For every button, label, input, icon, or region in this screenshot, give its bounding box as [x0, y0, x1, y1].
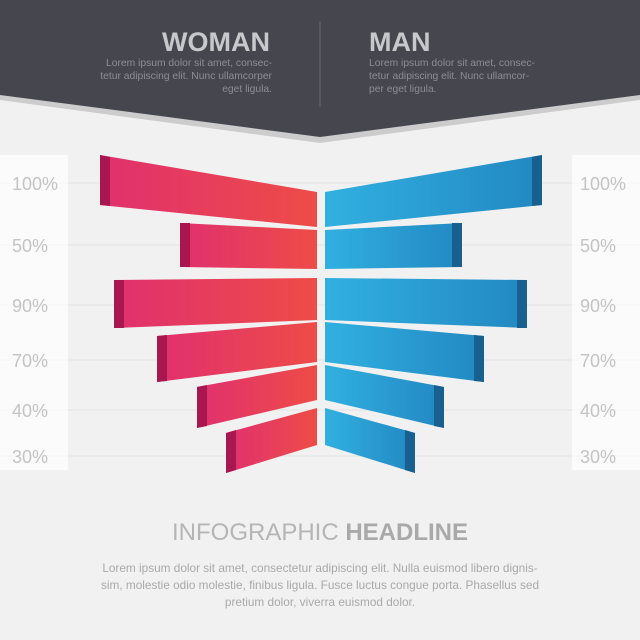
right labels panel: 30%	[580, 447, 616, 467]
heading: man	[369, 27, 535, 95]
heading: man: tetur adipiscing elit. Nunc ullamcor-	[369, 71, 529, 82]
man bars	[325, 155, 542, 473]
grid lines	[0, 183, 640, 456]
right labels panel: 100%	[580, 174, 626, 194]
heading: woman: tetur adipiscing elit. Nunc ullamcorper	[100, 71, 273, 82]
right labels panel: 90%	[580, 296, 616, 316]
left labels panel: 100%	[12, 174, 58, 194]
heading: woman: eget ligula.	[222, 84, 272, 95]
heading: woman: Lorem ipsum dolor sit amet, consec-	[106, 58, 272, 69]
heading: man: per eget ligula.	[369, 84, 437, 95]
body paragraph: sim, molestie odio molestie, finibus ligula. Fusce luctus congue porta. Phasellus sed	[101, 578, 539, 592]
heading: man: Lorem ipsum dolor sit amet, consec-	[369, 58, 535, 69]
woman bars	[100, 155, 317, 473]
left labels panel	[0, 155, 68, 470]
right labels panel: 40%	[580, 401, 616, 421]
body paragraph	[101, 561, 539, 609]
right labels panel: 50%	[580, 236, 616, 256]
heading: woman	[100, 27, 273, 95]
header panel	[0, 0, 640, 143]
left labels panel: 90%	[12, 296, 48, 316]
body paragraph: Lorem ipsum dolor sit amet, consectetur adipiscing elit. Nulla euismod libero dignis-	[102, 561, 538, 575]
left labels panel: 70%	[12, 351, 48, 371]
left labels panel: 40%	[12, 401, 48, 421]
body paragraph: pretium dolor, viverra euismod dolor.	[225, 595, 415, 609]
right labels panel	[572, 155, 640, 470]
headline: INFOGRAPHIC HEADLINE	[172, 519, 468, 546]
left labels panel: 50%	[12, 236, 48, 256]
right labels panel: 70%	[580, 351, 616, 371]
heading: woman: WOMAN	[162, 27, 270, 57]
left labels panel: 30%	[12, 447, 48, 467]
heading: man: MAN	[369, 27, 430, 57]
